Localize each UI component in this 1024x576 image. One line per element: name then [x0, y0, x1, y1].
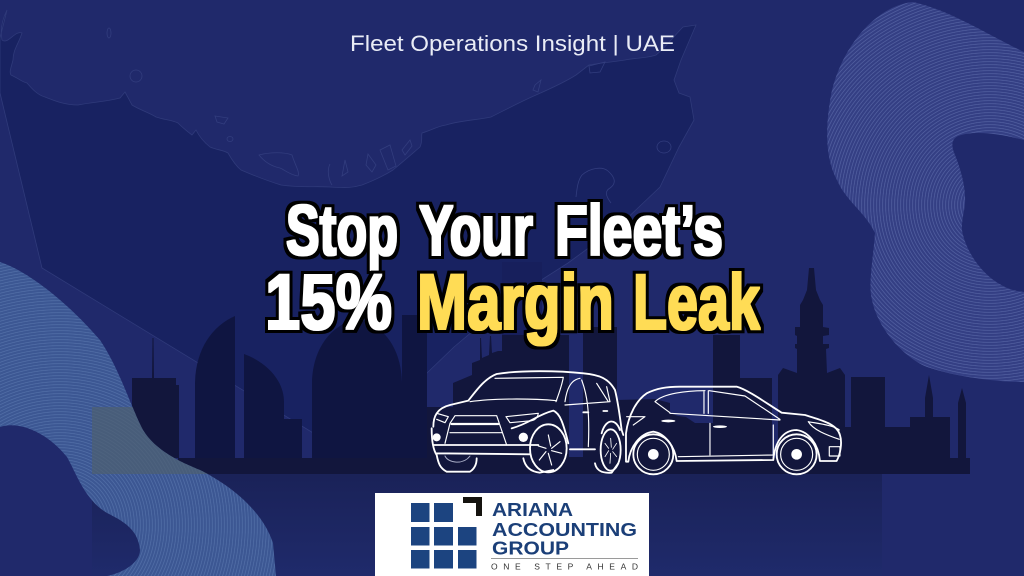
title line 1: Your [419, 192, 533, 271]
title line 2: Margin [417, 257, 614, 346]
title line 1 [286, 192, 723, 271]
logo panel [375, 493, 649, 576]
title line 1: Fleet’s [555, 192, 723, 271]
title line 1: Stop [286, 192, 398, 271]
logo corner mark [463, 497, 482, 516]
title line 2 [265, 257, 761, 346]
reflection under skyline [92, 474, 882, 576]
title line 2: 15% [265, 257, 392, 346]
map of UAE coastline [0, 10, 696, 459]
logo wordmark [492, 499, 637, 558]
logo wordmark: ACCOUNTING [492, 519, 637, 540]
skyline silhouette [132, 268, 970, 474]
title line 2: Leak [633, 257, 761, 346]
logo tagline: ONE STEP AHEAD [491, 562, 638, 572]
wave: right line art [827, 2, 1024, 382]
SUV line drawing [432, 371, 623, 473]
logo wordmark: ARIANA [492, 499, 573, 520]
hatchback line drawing [626, 387, 841, 474]
faint building behind title [502, 262, 542, 337]
logo mark squares [411, 503, 476, 568]
logo wordmark: GROUP [492, 538, 569, 558]
subtitle: Fleet Operations Insight | UAE [350, 31, 675, 56]
wave: left line art [0, 250, 280, 576]
